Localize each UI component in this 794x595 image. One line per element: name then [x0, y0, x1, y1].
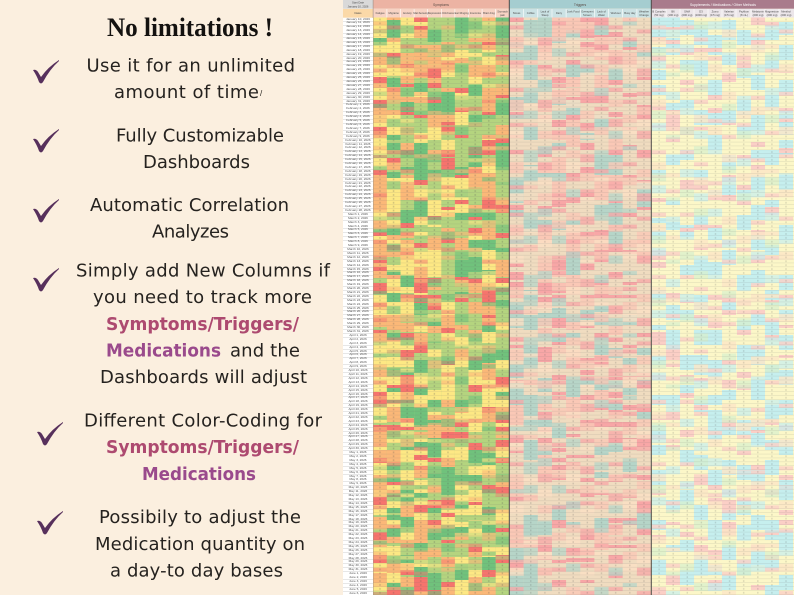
header: supplements: (1000 mg): [695, 13, 707, 17]
header: symptoms: Ear Ringing: [455, 11, 469, 15]
icon: check: [33, 199, 59, 222]
text: correlation: Automatic Correlation: [90, 195, 289, 216]
icon: check: [37, 422, 63, 446]
date column: February 19, 2026: [345, 173, 371, 177]
text: new columns: Symptoms/Triggers/: [106, 314, 299, 335]
date column: January 15, 2026: [346, 36, 370, 40]
date column: April 13, 2026: [348, 380, 368, 384]
date column: May 19, 2026: [349, 520, 367, 524]
header: supplements: (200 mg): [682, 13, 692, 17]
date column: March 13, 2026: [347, 259, 369, 263]
header: supplements: Valerian: [724, 10, 734, 14]
date column: February 3, 2026: [346, 110, 370, 114]
date column: April 23, 2026: [348, 419, 368, 423]
date column: February 6, 2026: [346, 122, 370, 126]
date column: April 16, 2026: [348, 392, 368, 396]
column: Weather Change: [637, 50, 651, 535]
date column: February 1, 2026: [346, 102, 370, 106]
header: symptoms: Dizziness: [442, 11, 455, 15]
text: new columns: Medications: [106, 341, 221, 362]
date column: May 13, 2026: [349, 497, 367, 501]
date column: January 16, 2026: [346, 40, 370, 44]
date column: January 24, 2026: [346, 71, 370, 75]
date column: May 20, 2026: [349, 524, 367, 528]
date column: March 10, 2026: [347, 247, 369, 251]
date column: May 6, 2026: [349, 470, 367, 474]
header: start date: [343, 0, 373, 18]
text: correlation: [90, 195, 289, 242]
date column: February 15, 2026: [345, 157, 371, 161]
date column: June 2, 2026: [349, 575, 367, 579]
column: Lack of Sleep: [538, 17, 552, 590]
date column: April 9, 2026: [349, 364, 367, 368]
date column: May 8, 2026: [349, 477, 367, 481]
header: supplements: (0.5 mg): [710, 13, 720, 17]
date column: April 27, 2026: [348, 434, 368, 438]
date column: February 26, 2026: [345, 200, 371, 204]
date column: February 12, 2026: [345, 145, 371, 149]
date column: April 17, 2026: [348, 395, 368, 399]
date column: April 28, 2026: [348, 438, 368, 442]
text: customizable dashboards: Dashboards: [143, 152, 250, 173]
column: Fatigue: [373, 17, 387, 595]
date column: June 1, 2026: [349, 571, 367, 575]
column: Zumo: [708, 35, 722, 590]
date column: March 27, 2026: [347, 313, 369, 317]
date column: March 29, 2026: [347, 321, 369, 325]
date column: March 16, 2026: [347, 270, 369, 274]
date column: April 18, 2026: [348, 399, 368, 403]
date column: May 17, 2026: [349, 513, 367, 517]
text: colour coding: Different Color-Coding for: [84, 411, 323, 432]
date column: January 22, 2026: [346, 63, 370, 67]
header: supplements: Psyllium: [739, 10, 750, 14]
column: Coffee: [524, 20, 538, 590]
header: triggers: Overspent: [581, 10, 594, 14]
date column: April 20, 2026: [348, 407, 368, 411]
date column: March 7, 2026: [348, 235, 368, 239]
date column: May 29, 2026: [349, 559, 367, 563]
date column: January 30, 2026: [346, 95, 370, 99]
header: supplements: Supplements / Medications / Other Methods: [690, 3, 756, 7]
column: SAM: [680, 20, 694, 585]
date column: February 10, 2026: [345, 138, 371, 142]
column: Magnesium: [765, 22, 779, 595]
column: B6: [666, 17, 680, 585]
date column: May 5, 2026: [349, 466, 367, 470]
header: triggers: Junk Food: [567, 10, 580, 14]
date column: April 25, 2026: [348, 427, 368, 431]
date column: February 28, 2026: [345, 208, 371, 212]
date column: January 25, 2026: [346, 75, 370, 79]
date column: May 31, 2026: [349, 567, 367, 571]
date column: January 12, 2026: [346, 24, 370, 28]
header: symptoms: Depression: [428, 11, 442, 15]
date column: March 21, 2026: [347, 290, 369, 294]
date column: May 16, 2026: [349, 509, 367, 513]
date column: March 22, 2026: [347, 294, 369, 298]
date column: April 26, 2026: [348, 431, 368, 435]
item: customizable dashboards: [33, 126, 284, 173]
item: medication quantity: [37, 507, 305, 582]
text: unlimited time: [86, 56, 295, 103]
date column: April 11, 2026: [349, 372, 367, 376]
date column: May 1, 2026: [349, 450, 367, 454]
date column: April 15, 2026: [348, 388, 368, 392]
header: supplements: (8 mL): [740, 13, 748, 17]
date column: March 20, 2026: [347, 286, 369, 290]
icon: check: [33, 129, 59, 152]
date column: February 13, 2026: [345, 149, 371, 153]
date column: March 18, 2026: [347, 278, 369, 282]
date column: March 14, 2026: [347, 263, 369, 267]
header: symptoms: Mal-Sensory: [413, 11, 429, 15]
column: D3: [694, 25, 708, 575]
header: symptoms: Brain Fog: [483, 11, 495, 15]
text: new columns: Simply add New Columns if: [76, 261, 331, 282]
date column: March 31, 2026: [347, 329, 369, 333]
date column: February 2, 2026: [346, 106, 370, 110]
date column: March 3, 2026: [348, 220, 368, 224]
header: start date: Start Date: [352, 0, 365, 4]
item: new columns: [33, 261, 331, 388]
date column: May 3, 2026: [349, 458, 367, 462]
date column: January 29, 2026: [346, 91, 370, 95]
header: triggers: Lack of: [597, 10, 606, 14]
text: medication quantity: Medication quantity on: [95, 534, 305, 555]
text: medication quantity: a day-to day bases: [110, 561, 283, 582]
header: supplements: (0.5 mg): [724, 13, 734, 17]
header: symptoms: Stomach: [497, 10, 508, 14]
date column: April 8, 2026: [349, 360, 367, 364]
date column: April 5, 2026: [349, 349, 367, 353]
date column: April 12, 2026: [348, 376, 368, 380]
date column: March 9, 2026: [348, 243, 368, 247]
date column: February 22, 2026: [345, 184, 371, 188]
date column: April 30, 2026: [348, 446, 368, 450]
text: unlimited time: /: [260, 89, 263, 98]
date column: March 24, 2026: [347, 302, 369, 306]
column: Brain Fog: [482, 17, 496, 595]
header: supplements: (100 mg): [668, 13, 678, 17]
header: supplements: (50 mg): [654, 13, 664, 17]
text: colour coding: Medications: [142, 464, 256, 485]
date column: March 8, 2026: [348, 239, 368, 243]
date column: March 15, 2026: [347, 266, 369, 270]
date column: January 20, 2026: [346, 56, 370, 60]
date column: March 23, 2026: [347, 298, 369, 302]
text: colour coding: [84, 411, 323, 485]
date column: January 11, 2026: [346, 20, 370, 24]
header: triggers: Busy day: [624, 11, 636, 15]
date column: April 10, 2026: [348, 368, 368, 372]
date column: March 26, 2026: [347, 309, 369, 313]
column: Insomnia: [468, 38, 482, 595]
date column: January 17, 2026: [346, 44, 370, 48]
header: start date: Dates: [354, 11, 362, 15]
column: B Complex: [652, 17, 666, 595]
date column: May 2, 2026: [349, 454, 367, 458]
date column: May 15, 2026: [349, 505, 367, 509]
item: unlimited time: [33, 56, 295, 103]
header: symptoms: Fatigue: [376, 11, 385, 15]
column: Anxiety: [400, 17, 414, 595]
text: correlation: Analyzes: [152, 222, 229, 242]
date column: April 7, 2026: [349, 356, 367, 360]
header: symptoms: Insomnia: [470, 11, 481, 15]
text: new columns: Dashboards will adjust: [100, 367, 307, 388]
text: new columns: you need to track more: [93, 287, 312, 308]
date column: February 17, 2026: [345, 165, 371, 169]
date column: May 27, 2026: [349, 552, 367, 556]
date column: February 9, 2026: [346, 134, 370, 138]
date column: February 21, 2026: [345, 181, 371, 185]
date column: April 29, 2026: [348, 442, 368, 446]
header: supplements: Menthol: [781, 10, 791, 14]
icon: check: [37, 511, 63, 534]
date column: January 13, 2026: [346, 28, 370, 32]
text: unlimited time: Use it for an unlimited: [86, 56, 295, 77]
date column: March 30, 2026: [347, 325, 369, 329]
header: triggers: Stress: [513, 11, 521, 15]
date column: [343, 18, 373, 595]
date column: May 23, 2026: [349, 536, 367, 540]
date column: January 14, 2026: [346, 32, 370, 36]
date column: June 4, 2026: [349, 583, 367, 587]
column: Melatonin: [751, 17, 765, 590]
text: customizable dashboards: [116, 126, 284, 173]
date column: March 25, 2026: [347, 306, 369, 310]
header: triggers: [510, 0, 652, 18]
date column: February 4, 2026: [346, 114, 370, 118]
date column: March 5, 2026: [348, 227, 368, 231]
date column: April 3, 2026: [349, 341, 367, 345]
date column: February 25, 2026: [345, 196, 371, 200]
heatmap: supplements and medications: [652, 17, 794, 595]
date column: January 21, 2026: [346, 59, 370, 63]
header: start date: January 10, 2026: [348, 4, 369, 8]
column: Dizziness: [441, 42, 455, 595]
title: No limitations !: [107, 13, 273, 42]
icon: check: [33, 60, 59, 84]
column: Psyllium: [737, 30, 751, 575]
date column: May 4, 2026: [349, 462, 367, 466]
column: Migraine: [387, 17, 401, 595]
column: Menthol: [779, 22, 793, 590]
date column: May 26, 2026: [349, 548, 367, 552]
date column: February 20, 2026: [345, 177, 371, 181]
date column: May 7, 2026: [349, 474, 367, 478]
date column: May 18, 2026: [349, 516, 367, 520]
header: symptoms: pain: [500, 13, 506, 17]
header: supplements: (200 mg): [781, 13, 791, 17]
header: symptoms: Anxiety: [403, 11, 412, 15]
item: colour coding: [37, 411, 323, 485]
header: triggers: Coffee: [527, 11, 535, 15]
column: Junk Food: [566, 17, 580, 562]
header: supplements: [652, 0, 794, 18]
date column: May 9, 2026: [349, 481, 367, 485]
header: triggers: Triggers: [574, 3, 586, 7]
date column: June 6, 2026: [349, 591, 367, 595]
header: supplements: B6: [671, 10, 675, 14]
column: Busy day: [623, 17, 637, 548]
date column: April 21, 2026: [348, 411, 368, 415]
date column: February 5, 2026: [346, 118, 370, 122]
date column: February 16, 2026: [345, 161, 371, 165]
header: symptoms: [373, 0, 509, 18]
icon: check: [33, 268, 59, 292]
heatmap: symptoms: [373, 17, 509, 595]
text: new columns: [76, 261, 331, 388]
date column: January 31, 2026: [346, 99, 370, 103]
date column: May 22, 2026: [349, 532, 367, 536]
header: triggers: Screen: [583, 13, 592, 17]
date column: April 14, 2026: [348, 384, 368, 388]
column: Stomach pain: [496, 17, 509, 583]
date column: February 7, 2026: [346, 126, 370, 130]
text: colour coding: Symptoms/Triggers/: [106, 437, 299, 458]
date column: February 23, 2026: [345, 188, 371, 192]
date column: May 11, 2026: [349, 489, 367, 493]
column: Overspent: [580, 17, 594, 583]
text: unlimited time: amount of time: [114, 82, 259, 103]
date column: April 2, 2026: [349, 337, 367, 341]
date column: February 14, 2026: [345, 153, 371, 157]
date column: April 1, 2026: [349, 333, 367, 337]
date column: March 12, 2026: [347, 255, 369, 259]
column: Stress: [510, 17, 524, 595]
date column: March 28, 2026: [347, 317, 369, 321]
header: triggers: Lack of: [541, 10, 549, 14]
column: Valerian: [722, 20, 736, 590]
item: correlation: [33, 195, 289, 242]
date column: May 28, 2026: [349, 556, 367, 560]
date column: January 18, 2026: [346, 48, 370, 52]
header: triggers: Water: [598, 13, 605, 17]
date column: May 10, 2026: [349, 485, 367, 489]
date column: January 23, 2026: [346, 67, 370, 71]
header: supplements: Magnesium: [765, 10, 780, 14]
text: medication quantity: Possibily to adjust the: [99, 507, 301, 528]
date column: May 21, 2026: [349, 528, 367, 532]
column: Dairy: [552, 17, 566, 585]
header: supplements: Melatonin: [752, 10, 764, 14]
date column: June 5, 2026: [349, 587, 367, 591]
panel: feature list: [0, 0, 343, 595]
text: customizable dashboards: Fully Customizable: [116, 126, 284, 147]
date column: March 11, 2026: [347, 251, 369, 255]
date column: March 4, 2026: [348, 224, 368, 228]
header: supplements: Zumo: [712, 10, 719, 14]
date column: February 11, 2026: [345, 142, 371, 146]
column: Lack of Water: [594, 17, 609, 550]
header: triggers: Sleep: [541, 13, 549, 17]
column: Workout: [609, 32, 623, 578]
date column: January 28, 2026: [346, 87, 370, 91]
date column: February 27, 2026: [345, 204, 371, 208]
date column: January 27, 2026: [346, 83, 370, 87]
header: supplements: (200 mg): [767, 13, 777, 17]
text: medication quantity: [95, 507, 305, 582]
column: Ear Ringing: [455, 17, 469, 595]
column: Depression: [428, 30, 441, 595]
column: Mal-Sensory: [414, 17, 428, 595]
date column: May 14, 2026: [349, 501, 367, 505]
date column: January 26, 2026: [346, 79, 370, 83]
text: new columns: and the: [230, 341, 300, 362]
date column: April 4, 2026: [349, 345, 367, 349]
date column: May 30, 2026: [349, 563, 367, 567]
header: supplements: SAM: [684, 10, 691, 14]
date column: April 19, 2026: [348, 403, 368, 407]
date column: March 2, 2026: [348, 216, 368, 220]
date column: March 19, 2026: [347, 282, 369, 286]
header: symptoms: Migraine: [389, 11, 399, 15]
date column: May 24, 2026: [349, 540, 367, 544]
date column: February 8, 2026: [346, 130, 370, 134]
date column: May 25, 2026: [349, 544, 367, 548]
date column: April 24, 2026: [348, 423, 368, 427]
date column: April 6, 2026: [349, 352, 367, 356]
date column: February 18, 2026: [345, 169, 371, 173]
date column: June 3, 2026: [349, 579, 367, 583]
date column: May 12, 2026: [349, 493, 367, 497]
date column: March 6, 2026: [348, 231, 368, 235]
header: triggers: Change: [639, 13, 649, 17]
header: triggers: Dairy: [556, 11, 563, 15]
date column: March 1, 2026: [348, 212, 368, 216]
date column: April 22, 2026: [348, 415, 368, 419]
header: supplements: D3: [699, 10, 703, 14]
header: triggers: Workout: [611, 11, 621, 15]
header: triggers: Weather: [639, 10, 649, 14]
header: supplements: B Complex: [652, 10, 666, 14]
date column: March 17, 2026: [347, 274, 369, 278]
date column: January 19, 2026: [346, 52, 370, 56]
header: symptoms: Symptoms: [433, 3, 449, 7]
date column: February 24, 2026: [345, 192, 371, 196]
heatmap: triggers: [510, 17, 652, 595]
header: supplements: (200 mg): [753, 13, 763, 17]
